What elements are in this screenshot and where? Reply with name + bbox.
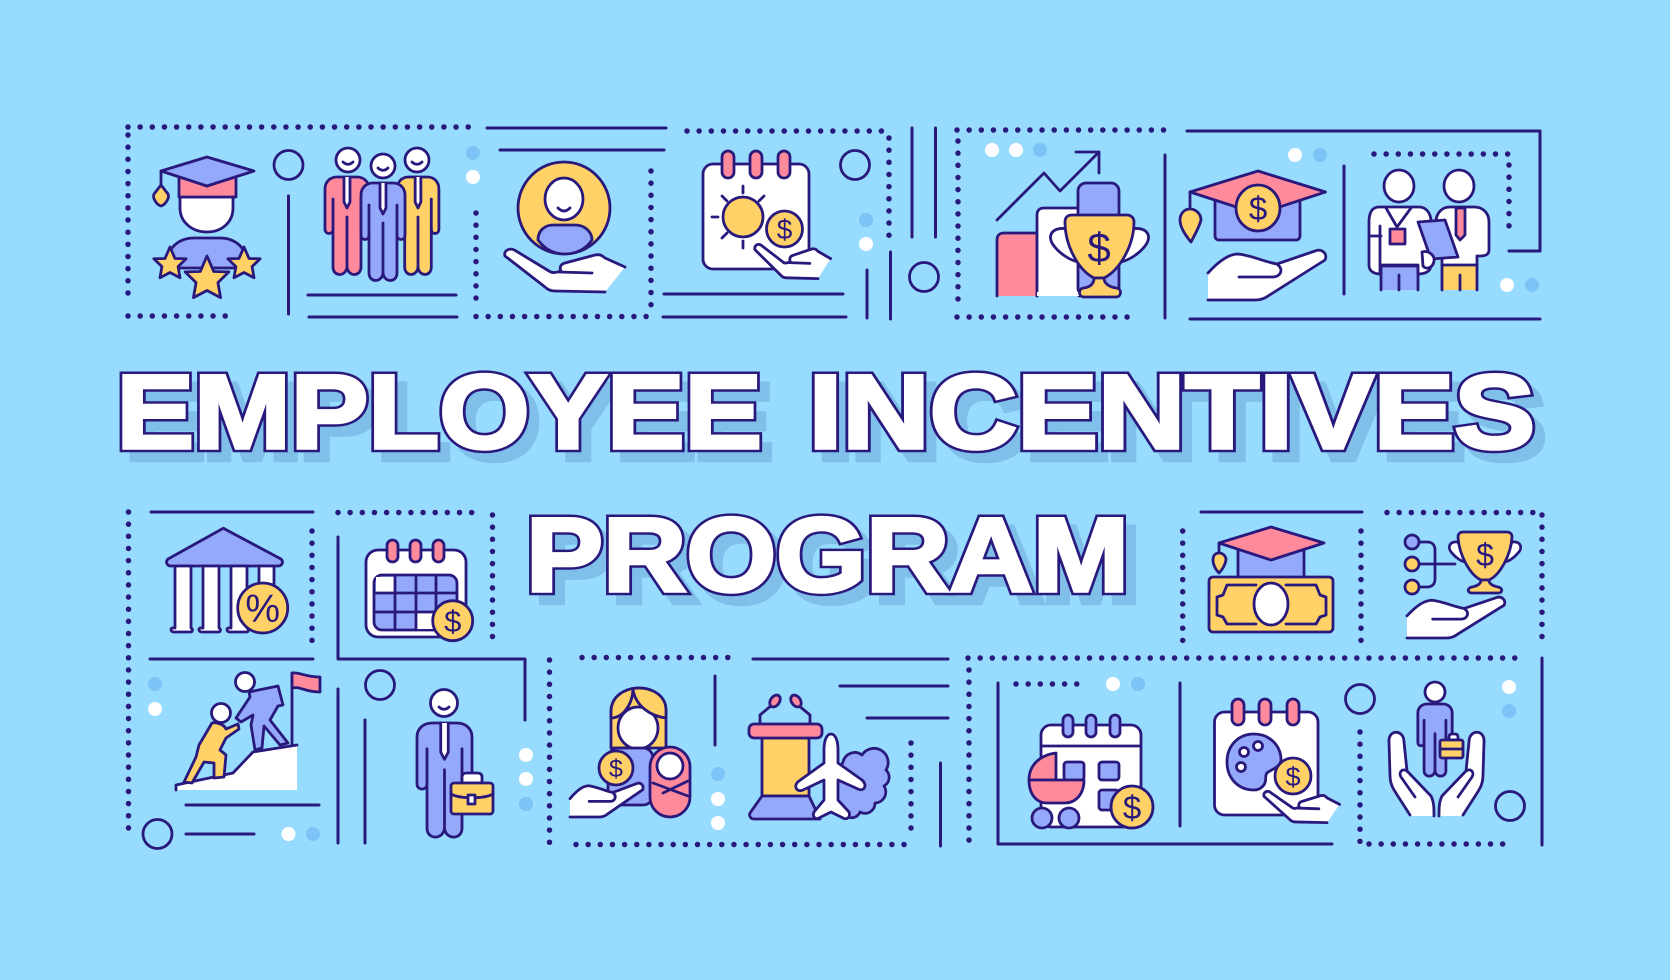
icon: bank with percent bbox=[167, 528, 288, 633]
icon: family leave calendar with stroller bbox=[1029, 715, 1153, 828]
title: INCENTIVES bbox=[809, 354, 1535, 471]
icon: tuition grant cap and hand bbox=[1180, 171, 1326, 300]
title: EMPLOYEE bbox=[116, 354, 762, 471]
icon: family leave calendar with stroller: $ bbox=[1123, 789, 1141, 826]
title: PROGRAM bbox=[526, 497, 1129, 614]
title bbox=[116, 354, 1545, 624]
icon: calendar with payment coin bbox=[366, 540, 473, 641]
title: EMPLOYEE bbox=[116, 354, 762, 471]
icon: art hobby calendar with palette bbox=[1214, 699, 1340, 823]
title: INCENTIVES bbox=[809, 354, 1535, 471]
title: EMPLOYEE bbox=[126, 364, 772, 481]
icon: parental leave mother and baby bbox=[570, 688, 690, 817]
icon: team of three bbox=[325, 148, 439, 280]
title: PROGRAM bbox=[536, 507, 1139, 624]
decorative frames: top row bbox=[128, 127, 1540, 319]
icon: performance chart with trophy: $ bbox=[1087, 224, 1111, 271]
icon: scholarship cap and banknote bbox=[1209, 527, 1333, 632]
icon: reward trophy on hand with options: $ bbox=[1476, 537, 1494, 573]
title: INCENTIVES bbox=[819, 364, 1545, 481]
icon: parental leave mother and baby: $ bbox=[609, 755, 623, 783]
icon: businessman with briefcase bbox=[417, 690, 493, 837]
icon: reward trophy on hand with options bbox=[1405, 532, 1521, 638]
icon: performance chart with trophy bbox=[997, 152, 1149, 297]
icon: conference podium with plane bbox=[749, 693, 889, 819]
icon: calendar with payment coin: $ bbox=[444, 604, 461, 639]
icon: tuition grant cap and hand: $ bbox=[1249, 190, 1267, 227]
icon: art hobby calendar with palette: $ bbox=[1285, 762, 1301, 792]
icon: employee portrait on hand bbox=[505, 162, 625, 292]
icon: employee held by two hands bbox=[1389, 682, 1484, 816]
icon: graduate with stars bbox=[154, 157, 260, 298]
icon: climbers helping each other bbox=[176, 672, 320, 790]
icon: bank with percent: % bbox=[245, 588, 280, 631]
title: PROGRAM bbox=[526, 497, 1129, 614]
decorative frames: bottom row bbox=[128, 512, 1542, 848]
icon: vacation calendar with sun and coin bbox=[703, 151, 831, 279]
icon: two colleagues with clipboard bbox=[1369, 170, 1489, 290]
icon: vacation calendar with sun and coin: $ bbox=[777, 214, 793, 245]
